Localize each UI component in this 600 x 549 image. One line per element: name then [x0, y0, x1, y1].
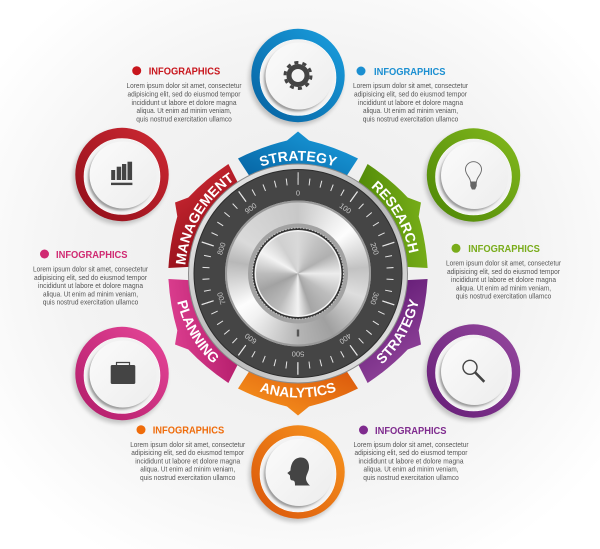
- text block: top right: quis nostrud exercitation ullamco: [363, 114, 458, 123]
- text block: bottom right: Lorem ipsum dolor sit amet, consectetur: [354, 440, 469, 449]
- icon: head silhouette: [287, 458, 310, 486]
- dial numbers: 800: [215, 241, 228, 256]
- text block: bottom left: quis nostrud exercitation ullamco: [140, 473, 235, 482]
- dial numbers: 200: [368, 241, 381, 256]
- icon: briefcase: [111, 362, 135, 384]
- text block: bottom left: incididunt ut labore et dolore magna: [135, 456, 241, 465]
- text block: middle left: INFOGRAPHICS: [56, 250, 128, 261]
- text block: middle left: incididunt ut labore et dolore magna: [38, 281, 144, 290]
- circle: pink briefcase: [73, 327, 169, 424]
- band: blue strategy: [238, 132, 358, 176]
- text block: top right: adipisicing elit, sed do eiusmod tempor: [354, 90, 467, 98]
- text block: middle right: INFOGRAPHICS: [468, 244, 540, 255]
- silver ring: [225, 200, 371, 346]
- text block: bottom right: [354, 426, 469, 482]
- text block: bottom right: incididunt ut labore et dolore magna: [358, 456, 464, 465]
- text block: top left: quis nostrud exercitation ullamco: [136, 114, 232, 123]
- circle: red chart: [73, 128, 169, 224]
- dial numbers: 400: [338, 331, 353, 346]
- text block: middle left: [33, 250, 149, 307]
- text block: middle right: Lorem ipsum dolor sit amet, consectetur: [446, 258, 562, 268]
- text block: top left: Lorem ipsum dolor sit amet, consectetur: [126, 81, 242, 90]
- label: strategy: STRATEGY: [260, 150, 338, 166]
- icon: bar chart: [111, 162, 132, 185]
- text block: bottom left: Lorem ipsum dolor sit amet, consectetur: [130, 440, 246, 449]
- label: analytics: ANALYTICS: [260, 382, 336, 398]
- text block: middle right: [446, 244, 562, 301]
- text block: middle right: aliqua. Ut enim ad minim veniam,: [456, 283, 551, 292]
- text block: middle left: quis nostrud exercitation ullamco: [43, 298, 138, 307]
- dial numbers: 100: [338, 201, 353, 216]
- text block: middle left: adipisicing elit, sed do eiusmod tempor: [34, 273, 147, 282]
- band: purple strategy: [358, 279, 428, 383]
- circle: green bulb: [424, 128, 520, 225]
- text block: top left: INFOGRAPHICS: [149, 66, 220, 78]
- text block: bottom left: [130, 425, 246, 482]
- text block: top left: adipisicing elit, sed do eiusmod tempor: [128, 90, 241, 98]
- label: strategy lower: STRATEGY: [376, 298, 418, 364]
- text block: top left: aliqua. Ut enim ad minim veniam,: [136, 106, 232, 115]
- text block: bottom left: adipisicing elit, sed do eiusmod tempor: [131, 448, 245, 457]
- dial numbers: 600: [243, 331, 258, 346]
- band: pink planning: [168, 279, 238, 383]
- text block: top left: [126, 66, 242, 123]
- icon: light bulb: [466, 162, 482, 190]
- dial numbers: 900: [243, 201, 258, 216]
- text block: middle right: incididunt ut labore et dolore magna: [451, 275, 557, 284]
- circle: blue gear: [249, 29, 345, 125]
- dial numbers: 500: [292, 350, 304, 358]
- text block: bottom left: INFOGRAPHICS: [153, 426, 224, 436]
- label: planning: PLANNING: [177, 300, 218, 362]
- text block: bottom right: INFOGRAPHICS: [375, 426, 447, 437]
- dial numbers: 700: [215, 291, 228, 306]
- label: research: RESEARCH: [372, 180, 418, 253]
- text block: top right: incididunt ut labore et dolore magna: [358, 98, 464, 107]
- text block: bottom right: adipisicing elit, sed do eiusmod tempor: [354, 448, 468, 457]
- text block: bottom right: quis nostrud exercitation ullamco: [363, 473, 459, 482]
- combination dial: [188, 164, 408, 384]
- band: orange analytics: [238, 372, 358, 416]
- dial numbers: 0: [296, 188, 300, 198]
- metal knob: [256, 232, 340, 316]
- text block: bottom right: aliqua. Ut enim ad minim veniam,: [364, 465, 458, 474]
- text block: top right: aliqua. Ut enim ad minim veniam,: [363, 106, 458, 115]
- text block: middle right: quis nostrud exercitation ullamco: [456, 292, 551, 301]
- text block: top left: incididunt ut labore et dolore magna: [132, 98, 237, 107]
- circle: purple magnifier: [424, 324, 520, 421]
- text block: middle right: adipisicing elit, sed do eiusmod tempor: [447, 267, 560, 276]
- text block: top right: Lorem ipsum dolor sit amet, consectetur: [353, 81, 469, 90]
- circle: orange head: [249, 425, 345, 522]
- text block: top right: INFOGRAPHICS: [374, 67, 446, 78]
- text block: bottom left: aliqua. Ut enim ad minim veniam,: [140, 465, 235, 474]
- dial numbers: 300: [368, 291, 381, 306]
- icon: gear: [285, 62, 311, 88]
- band: green research: [358, 164, 428, 268]
- text block: top right: [353, 66, 469, 123]
- text block: middle left: Lorem ipsum dolor sit amet, consectetur: [33, 264, 149, 274]
- icon: magnifier: [463, 360, 484, 382]
- band: red management: [168, 164, 238, 268]
- text block: middle left: aliqua. Ut enim ad minim veniam,: [43, 289, 138, 298]
- dial numbers: [215, 188, 381, 358]
- label: management: MANAGEMENT: [176, 172, 232, 264]
